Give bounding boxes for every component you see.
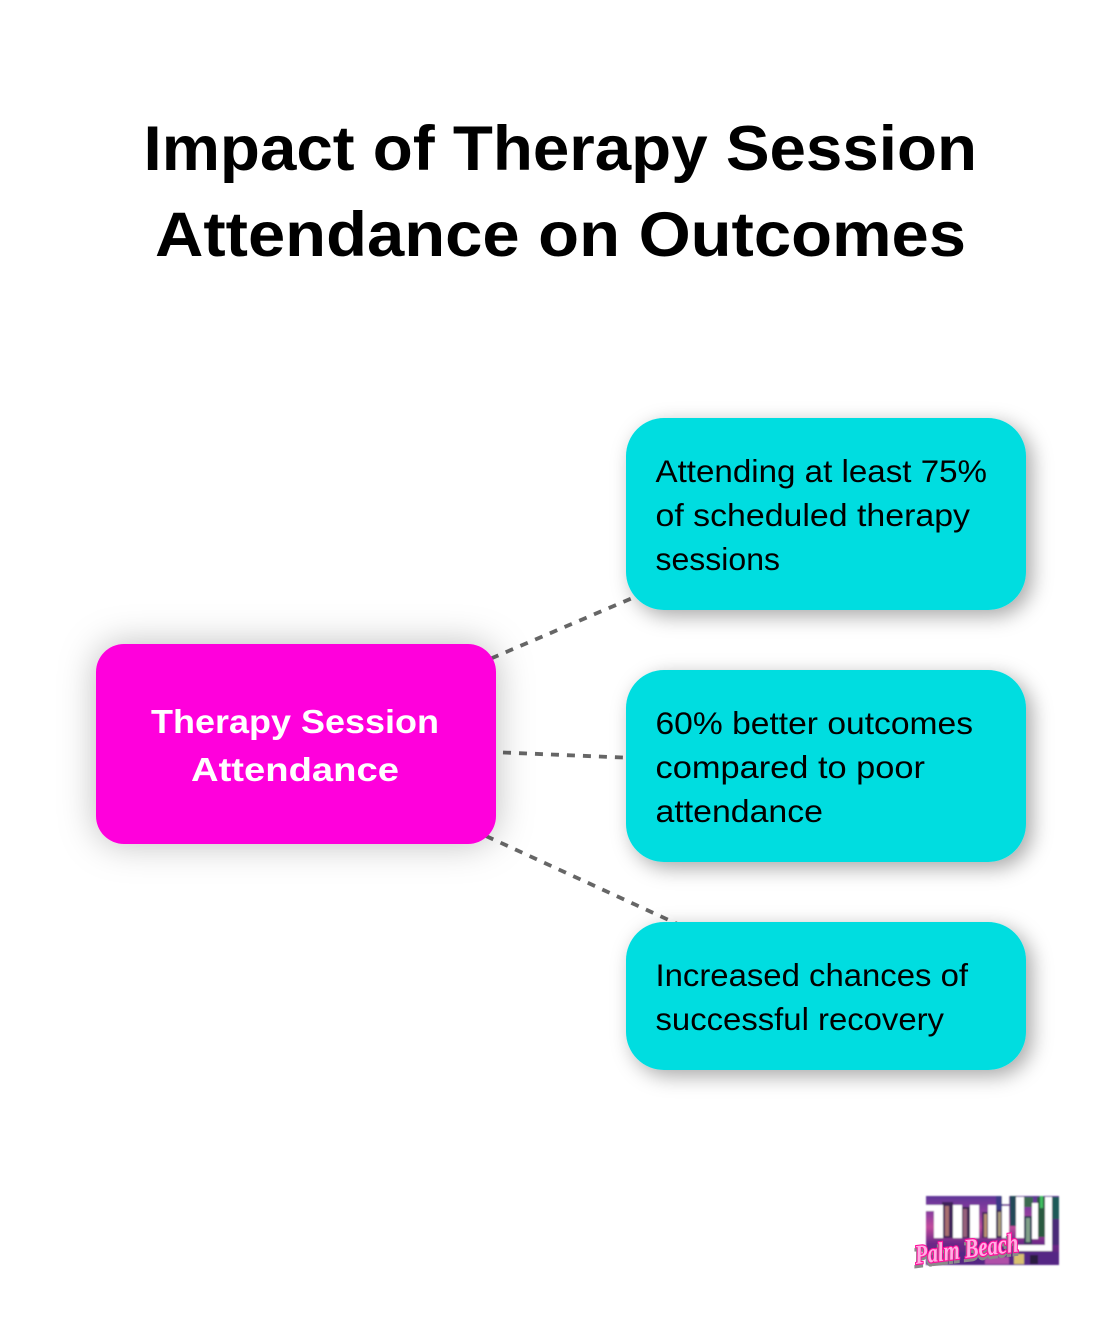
connector: attendance to recovery card xyxy=(486,836,680,925)
panel: increased chances of recovery xyxy=(626,922,1026,1070)
logo: amitay Palm Beach xyxy=(912,1191,1059,1273)
panel: therapy session attendance xyxy=(96,644,496,844)
title xyxy=(144,114,977,270)
panel: 60% better outcomes: 60% better outcomes xyxy=(656,705,973,741)
panel: attending at least 75%: sessions xyxy=(656,541,780,577)
panel: increased chances of recovery: Increased chances of xyxy=(656,957,968,993)
connector: attendance to 60% card xyxy=(503,752,630,758)
panel: therapy session attendance: Therapy Session xyxy=(151,703,439,740)
panel: 60% better outcomes xyxy=(626,670,1026,862)
panel: attending at least 75%: of scheduled therapy xyxy=(656,497,970,533)
logo: amitay Palm Beach: Palm Beach xyxy=(912,1231,1019,1273)
logo: amitay Palm Beach: Palm Beach xyxy=(912,1228,1020,1270)
panel: increased chances of recovery: successful recovery xyxy=(656,1001,944,1037)
panel: 60% better outcomes: attendance xyxy=(656,793,823,829)
letters xyxy=(926,1191,1052,1251)
panel: 60% better outcomes: compared to poor xyxy=(656,749,925,785)
title: Impact of Therapy Session xyxy=(144,114,977,184)
title: Attendance on Outcomes xyxy=(155,200,966,270)
connector: attendance to 75% card xyxy=(491,594,641,658)
panel: attending at least 75%: Attending at least 75% xyxy=(656,453,987,489)
panel: attending at least 75% xyxy=(626,418,1026,610)
panel: therapy session attendance: Attendance xyxy=(191,751,399,788)
